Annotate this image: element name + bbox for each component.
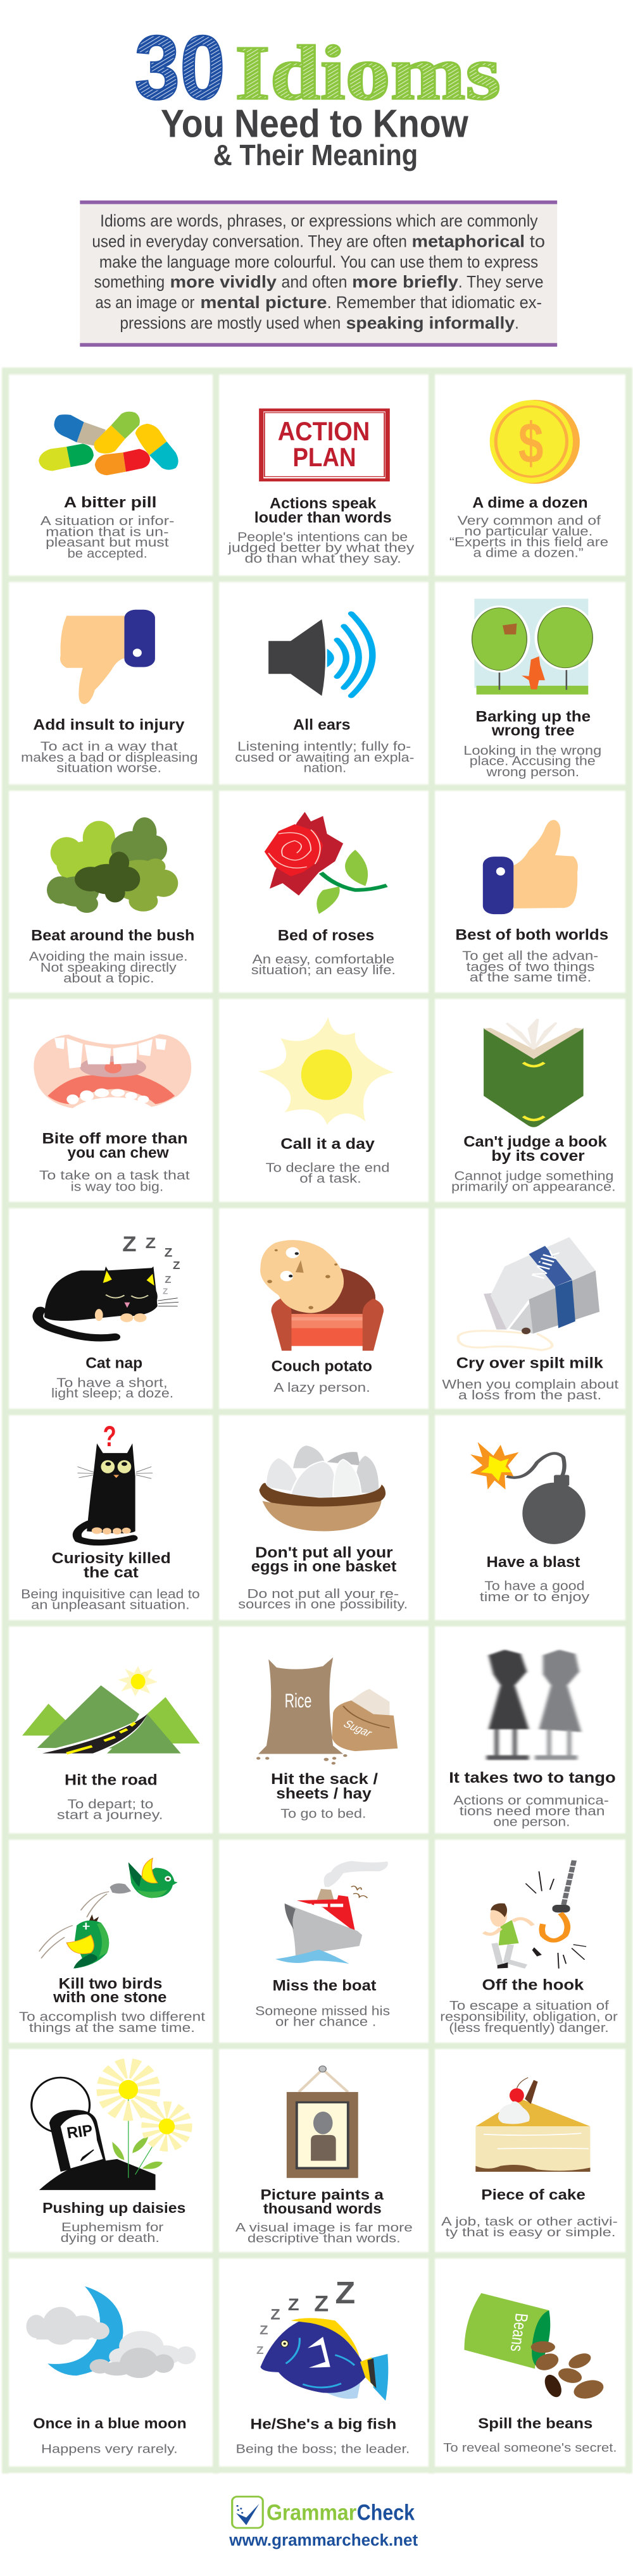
panel: A bitter pill (39, 412, 179, 560)
icon: open mouth (34, 1034, 191, 1108)
title: 30 Idioms: 30 (134, 16, 225, 118)
description (19, 2010, 205, 2035)
panel: Actions speak louder than words (227, 410, 415, 566)
description: time or to enjoy (480, 1590, 590, 1604)
intro text: and often (282, 272, 348, 291)
cards: rows 1 and 2 (21, 400, 608, 779)
title: 30 Idioms (134, 16, 501, 118)
description: sources in one possibility. (238, 1597, 408, 1612)
icon: eggs in a basket (259, 1446, 385, 1531)
description (449, 514, 608, 560)
icon: road through mountains (22, 1666, 200, 1754)
description: cused or awaiting an expla- (235, 751, 414, 765)
description: To depart; to (68, 1797, 153, 1811)
cards: rows 9 and 10 and footer (26, 2066, 618, 2550)
description: A visual image is far more (235, 2221, 413, 2234)
description: situation worse. (56, 761, 161, 775)
title: by its cover (491, 1148, 585, 1165)
title: Cat nap (85, 1354, 142, 1372)
description: makes a bad or displeasing (21, 751, 198, 765)
description: To accomplish two different (19, 2010, 205, 2024)
description (238, 1587, 408, 1612)
icon: gold coin (490, 400, 580, 484)
panel: Off the hook (440, 1861, 618, 2035)
description: Happens very rarely. (41, 2443, 178, 2456)
icon: gold coin: $ (518, 411, 543, 475)
intro text: more briefly (352, 272, 458, 291)
panel: All ears (235, 614, 414, 775)
description: one person. (493, 1815, 570, 1829)
icon: potato on couch (260, 1240, 384, 1351)
description: nation. (304, 761, 346, 775)
cards: rows 7 and 8 (19, 1650, 618, 2035)
description (39, 1168, 190, 1194)
description (462, 949, 598, 984)
description (21, 1587, 200, 1612)
title (251, 1544, 396, 1575)
panel: It takes two to tango (449, 1650, 616, 1829)
icon: sleeping blue fish: Z (256, 2344, 264, 2357)
description (441, 2215, 618, 2239)
panel: Curiosity killed the cat (21, 1420, 200, 1612)
title: Beat around the bush (31, 927, 194, 944)
title: Call it a day (280, 1135, 375, 1153)
icon: sleeping blue fish (256, 2276, 388, 2401)
description: place. Accusing the (470, 754, 596, 768)
icon: check mark box (232, 2497, 263, 2528)
description (251, 953, 396, 977)
description: Do not put all your re- (247, 1587, 399, 1601)
panel: He/She's a big fish (235, 2276, 410, 2456)
description: dying or death. (61, 2231, 160, 2245)
description: A job, task or other activi- (441, 2215, 618, 2228)
description: Very common and of (458, 514, 601, 528)
title: sheets / hay (276, 1785, 372, 1802)
description: Someone missed his (255, 2004, 390, 2018)
description: Not speaking directly (41, 960, 177, 975)
title: Barking up the (475, 708, 591, 725)
intro text: pressions are mostly used when (120, 313, 341, 332)
title: thousand words (263, 2201, 382, 2217)
title: with one stone (53, 1989, 166, 2006)
title: 30 Idioms: Idioms (235, 30, 501, 116)
description (51, 1376, 173, 1401)
icon: sleeping cat (38, 1232, 180, 1338)
description: of a task. (299, 1172, 361, 1186)
title: Curiosity killed (52, 1550, 171, 1567)
title: All ears (293, 716, 351, 733)
description (29, 950, 188, 986)
intro text: . (515, 313, 519, 332)
description: To go to bed. (280, 1807, 366, 1821)
intro panel (80, 201, 557, 347)
icon: thumbs up (483, 820, 578, 914)
description: People's intentions can be (237, 530, 408, 544)
description: To act in a way that (41, 740, 178, 753)
description: light sleep; a doze. (51, 1387, 173, 1401)
description (453, 1793, 609, 1829)
title: Picture paints a (260, 2187, 384, 2203)
cards: rows 3 and 4 (29, 812, 616, 1194)
panel: Pushing up daisies (32, 2068, 185, 2245)
intro text: speaking informally (346, 313, 515, 332)
panel: Add insult to injury (21, 610, 198, 775)
header block (80, 16, 557, 347)
panel: Spill the beans (443, 2293, 617, 2455)
icon: bush (47, 817, 178, 913)
description (235, 2221, 413, 2245)
description: To have a short, (56, 1376, 168, 1390)
title: Miss the boat (273, 1977, 376, 1994)
icon: rose (265, 812, 387, 914)
description: is way too big. (71, 1180, 163, 1194)
intro text: metaphorical (412, 232, 525, 251)
panel: Don't put all your eggs in one basket (238, 1446, 408, 1612)
description: To reveal someone's secret. (443, 2441, 617, 2455)
icon: speaker (268, 614, 372, 696)
panel: Bite off more than you can chew (34, 1034, 191, 1194)
title (271, 1771, 378, 1802)
description (227, 530, 415, 566)
icon: dog barking at squirrel in trees (468, 598, 596, 695)
title: Once in a blue moon (33, 2415, 187, 2432)
icon: spilled milk carton: Milk (527, 1247, 564, 1281)
description: do than what they say. (245, 552, 401, 566)
description (442, 1377, 618, 1403)
description: To take on a task that (39, 1168, 190, 1182)
icon: sleeping blue fish: Z (314, 2292, 329, 2317)
title: Add insult to injury (33, 716, 184, 733)
logo wordmark: Check (357, 2501, 415, 2525)
panel: A dime a dozen (449, 400, 608, 560)
icon: man escaping a hook (484, 1861, 586, 1969)
description (463, 743, 601, 779)
title: Pushing up daisies (42, 2200, 185, 2217)
icon: thumbs down (60, 610, 155, 704)
description: A situation or infor- (41, 514, 175, 528)
description: To have a good (484, 1579, 585, 1593)
title (53, 1975, 166, 2006)
panel: Cat nap (38, 1232, 180, 1401)
title: Spill the beans (478, 2415, 592, 2432)
icon: curious cat (77, 1420, 153, 1542)
description: start a journey. (57, 1808, 163, 1822)
icon: curious cat: ? (103, 1420, 116, 1452)
title (260, 2187, 384, 2217)
title: the cat (84, 1564, 139, 1581)
panel: Hit the road (22, 1666, 200, 1822)
description (480, 1579, 590, 1604)
description: ty that is easy or simple. (445, 2226, 616, 2239)
panel: Piece of cake (441, 2078, 618, 2239)
title: Couch potato (272, 1358, 372, 1375)
icon: can of beans (464, 2293, 606, 2402)
title: Hit the sack / (271, 1771, 378, 1788)
description: be accepted. (68, 547, 147, 560)
icon: two birds and a stone (39, 1858, 178, 1969)
panel: Couch potato (260, 1240, 384, 1395)
icon: framed picture (287, 2066, 358, 2178)
description: Being inquisitive can lead to (21, 1587, 200, 1601)
icon: sleeping blue fish: Z (335, 2276, 355, 2310)
icon: spilled milk carton (458, 1237, 599, 1350)
description: To get all the advan- (462, 949, 598, 963)
icon: sleeping blue fish: Z (270, 2306, 280, 2323)
description (57, 1797, 163, 1822)
icon: action plan stamp: PLAN (292, 443, 356, 473)
description: tions need more than (460, 1804, 605, 1818)
description: about a topic. (63, 972, 154, 986)
description: Avoiding the main issue. (29, 950, 188, 963)
icon: rice and sugar sacks: Rice (285, 1690, 311, 1712)
panel: Bed of roses (251, 812, 396, 977)
title: Piece of cake (481, 2187, 586, 2203)
description: a dime a dozen.” (473, 546, 584, 560)
description (21, 740, 198, 775)
icon: ship (275, 1861, 388, 1964)
panel: Best of both worlds (455, 820, 608, 984)
panel: Cry over spilt milk (442, 1237, 618, 1403)
intro text: something (94, 272, 165, 291)
panel: Miss the boat (255, 1861, 390, 2029)
intro text (92, 211, 545, 332)
title: A dime a dozen (472, 494, 588, 511)
description: things at the same time. (29, 2021, 195, 2035)
icon: sleeping cat: Z (165, 1246, 172, 1260)
title: eggs in one basket (251, 1558, 396, 1575)
title: you can chew (68, 1144, 169, 1161)
panel: Can't judge a book by its cover (451, 1019, 616, 1194)
icon: gravestone with daisies: RIP (65, 2121, 94, 2142)
title: Don't put all your (255, 1544, 393, 1561)
icon: blurred dancers (487, 1650, 581, 1760)
icon: open book (484, 1019, 584, 1127)
description: a loss from the past. (458, 1388, 601, 1403)
description (235, 740, 414, 775)
description: situation; an easy life. (251, 963, 396, 977)
title: Bite off more than (42, 1130, 188, 1147)
description: pleasant but must (46, 536, 169, 550)
panel: Kill two birds with one stone (19, 1858, 205, 2035)
description: To declare the end (266, 1161, 389, 1175)
title: louder than words (254, 509, 392, 526)
icon: action plan stamp (261, 410, 387, 480)
intro text: . They serve (458, 272, 543, 291)
title (254, 495, 392, 526)
panel: Have a blast (470, 1442, 590, 1604)
icon: sleeping cat: Z (163, 1287, 168, 1296)
icon: sleeping blue fish: Z (260, 2323, 268, 2338)
title: Kill two birds (58, 1975, 162, 1992)
subtitle: & Their Meaning: & Their Meaning (213, 139, 418, 171)
description (451, 1169, 616, 1194)
icon: bomb (470, 1442, 586, 1544)
description: Listening intently; fully fo- (237, 740, 411, 753)
icon: rice and sugar sacks: Sugar (341, 1718, 375, 1739)
footer: logo (229, 2497, 418, 2550)
title: Have a blast (487, 1554, 580, 1571)
title: A bitter pill (64, 494, 156, 511)
description: or her chance . (275, 2015, 376, 2029)
icon: cake slice (475, 2078, 590, 2172)
title (463, 1133, 607, 1165)
panel: Call it a day (258, 1017, 394, 1186)
panel: Once in a blue moon (26, 2286, 196, 2456)
description: tages of two things (467, 960, 594, 974)
title: Off the hook (482, 1976, 584, 1993)
icon: sleeping cat: Z (165, 1274, 171, 1285)
panel: Hit the sack / sheets / hay (256, 1657, 398, 1821)
icon: sleeping cat: Z (122, 1232, 137, 1256)
icon: sleeping cat: Z (173, 1259, 180, 1272)
intro text: mental picture (200, 293, 327, 312)
icon: gravestone with daisies (32, 2068, 182, 2190)
title: Hit the road (65, 1771, 158, 1788)
icon: action plan stamp: ACTION (278, 417, 370, 446)
description: wrong person. (486, 765, 579, 779)
description: descriptive than words. (248, 2232, 401, 2245)
icon: rice and sugar sacks (256, 1657, 398, 1764)
icon: pills (39, 412, 179, 475)
title: He/She's a big fish (250, 2416, 396, 2432)
description (61, 2221, 163, 2245)
description: Being the boss; the leader. (235, 2443, 410, 2456)
intro text: to (530, 232, 545, 251)
description: Euphemism for (61, 2221, 163, 2234)
icon: sleeping blue fish: Z (288, 2295, 299, 2314)
panel: Picture paints a thousand words (235, 2066, 413, 2245)
description: at the same time. (470, 970, 591, 984)
title (475, 708, 591, 739)
intro text: as an image or (96, 293, 194, 312)
title (52, 1550, 171, 1581)
description: judged better by what they (227, 541, 415, 555)
website url: www.grammarcheck.net (229, 2531, 418, 2550)
title: Actions speak (270, 495, 377, 512)
panel: Barking up the wrong tree (463, 598, 601, 779)
title: Bed of roses (278, 927, 374, 944)
intro text: more vividly (170, 272, 277, 291)
icon: sleeping cat: Z (146, 1234, 156, 1251)
description: an unpleasant situation. (31, 1598, 190, 1612)
cards: rows 5 and 6 (21, 1232, 618, 1612)
description: Looking in the wrong (463, 743, 601, 758)
title (42, 1130, 188, 1161)
description (266, 1161, 389, 1186)
description (440, 1999, 618, 2035)
panel: Beat around the bush (29, 817, 194, 986)
description: An easy, comfortable (253, 953, 394, 967)
description: mation that is un- (46, 525, 169, 539)
icon: crescent moon and clouds (26, 2286, 196, 2378)
title: wrong tree (491, 722, 575, 739)
logo wordmark: Grammar (266, 2501, 356, 2525)
icon: can of beans: Beans (506, 2312, 532, 2353)
icon: sun (258, 1017, 394, 1125)
description (41, 514, 175, 560)
description: no particular value. (464, 524, 592, 538)
description (255, 2004, 390, 2029)
description: A lazy person. (273, 1381, 370, 1395)
